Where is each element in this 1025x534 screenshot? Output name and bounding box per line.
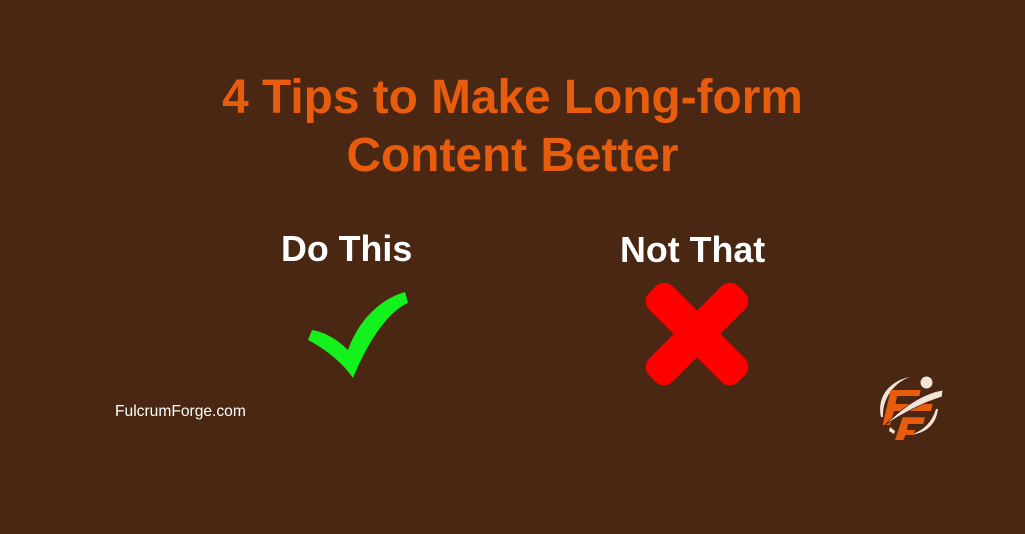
logo letters: [883, 390, 933, 440]
heading: not that: Not That: [620, 230, 765, 270]
logo swoosh: [885, 390, 943, 425]
icon: red cross: [646, 282, 748, 386]
title: 4 Tips to Make Long-form: [222, 71, 803, 124]
icon: green check mark: [308, 292, 408, 378]
logo upper arc: [880, 377, 910, 417]
logo small arrow: [889, 427, 895, 434]
heading: do this: Do This: [281, 229, 412, 269]
icon: Fulcrum Forge logo: [880, 376, 942, 440]
title: [222, 71, 803, 182]
logo lower arc: [910, 409, 938, 435]
website label: FulcrumForge.com: [115, 403, 246, 420]
title: Content Better: [347, 129, 678, 182]
logo ball: [920, 376, 932, 388]
